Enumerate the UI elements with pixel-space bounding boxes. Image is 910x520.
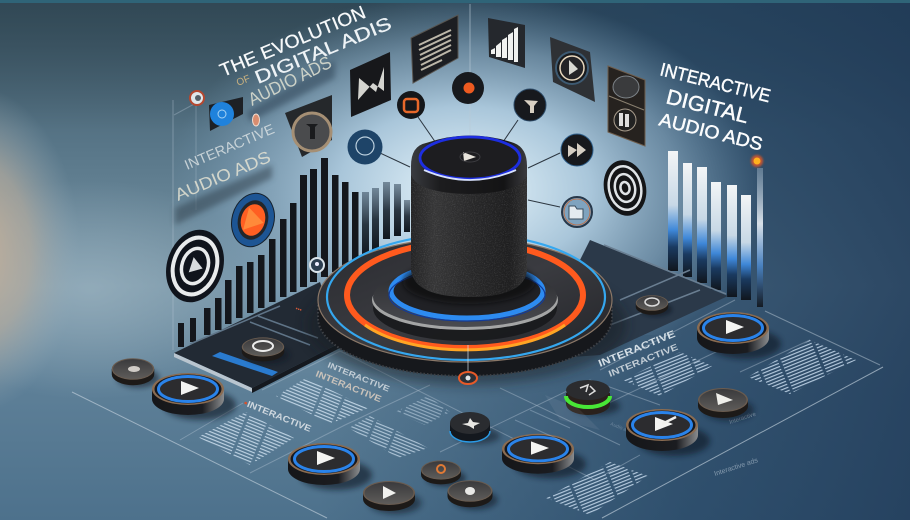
icon: spiral disc — [599, 156, 651, 220]
icon: orange dot circle — [452, 72, 484, 104]
heading: interactive digital audio ads right — [657, 59, 773, 155]
heading: interactive digital audio ads right: AUDIO ADS — [657, 109, 765, 155]
button: star blue — [450, 412, 500, 444]
title: the evolution of digital audio ads: DIGITAL ADIS — [251, 12, 394, 88]
panel: left dashboard: ••• — [294, 306, 302, 314]
button: small dark top left — [112, 358, 159, 388]
icon: small ring on chart — [310, 258, 324, 272]
button: big blue lower — [288, 443, 372, 490]
icon: connector lines — [380, 117, 560, 207]
icon: concentric target play — [157, 222, 233, 310]
heading: interactive audio ads left — [172, 121, 277, 225]
button: grey play lower — [363, 481, 421, 514]
text block: small captions — [609, 411, 759, 478]
button: blue pause play right — [626, 409, 710, 456]
text block: lower left: ▪INTERACTIVE — [242, 398, 313, 434]
button: blue upper right — [697, 312, 781, 359]
heading: interactive audio ads left: AUDIO ADS — [172, 147, 273, 205]
title: the evolution of digital audio ads — [216, 1, 394, 122]
text block: small captions: Interactive — [729, 411, 758, 426]
text block: center — [349, 416, 428, 458]
icon: orange square circle — [397, 91, 425, 119]
bar chart left — [178, 158, 410, 347]
icon: signal bars tile — [488, 18, 525, 68]
button: lock icon — [448, 480, 498, 510]
icon: small ring under disc — [459, 345, 477, 384]
bar chart right — [668, 151, 763, 307]
text block: interactive right: INTERACTIVE — [607, 342, 679, 379]
text block: center left: INTERACTIVE — [314, 369, 383, 404]
button: big blue left — [152, 373, 236, 420]
button: orange icon — [421, 460, 466, 487]
text block: center right small — [395, 396, 450, 425]
icon: play dial tile — [550, 37, 595, 102]
icon: flag circle — [514, 89, 546, 121]
heading: interactive digital audio ads right: DIGITAL — [664, 86, 751, 128]
icon: stacked control panel — [608, 66, 645, 146]
panel: right dashboard — [530, 240, 728, 360]
text block: center left — [276, 361, 392, 424]
text block: far right — [748, 340, 856, 394]
icon: fast forward circle — [561, 134, 593, 166]
title: the evolution of digital audio ads: AUDIO ADS — [245, 52, 335, 110]
text block: bottom right — [546, 462, 648, 515]
button: blue center bottom — [502, 434, 586, 478]
button: green ring — [566, 380, 620, 415]
panel: lower right fine print — [515, 395, 600, 440]
button: grey play right — [698, 388, 754, 421]
heading: interactive audio ads left: INTERACTIVE — [182, 121, 277, 173]
icon: folder circle — [562, 197, 592, 227]
icon: small red ring — [190, 91, 204, 105]
title: the evolution of digital audio ads: THE EVOLUTION — [216, 1, 369, 81]
text block: interactive right: INTERACTIVE — [597, 329, 678, 370]
icon: bowtie play tile — [350, 52, 391, 117]
title: the evolution of digital audio ads: OF — [235, 73, 252, 89]
base disc — [307, 234, 627, 385]
text block: small captions: Audio ads — [609, 421, 633, 435]
panel: left dashboard — [174, 282, 340, 393]
icon: dial photo tile — [285, 95, 332, 157]
heading: interactive digital audio ads right: INTERACTIVE — [658, 59, 773, 106]
icon: navy circle — [348, 130, 382, 164]
icon: small orange oval — [252, 114, 260, 126]
icon: blue dial tile — [209, 97, 243, 131]
icon: text screen tile — [411, 15, 458, 83]
smart speaker — [403, 136, 535, 304]
icon: orange play circle — [226, 188, 280, 252]
text block: interactive right — [597, 329, 712, 396]
text block: small captions: Interactive ads — [713, 457, 759, 478]
button: right panel dial — [636, 295, 672, 317]
button: left panel dial — [242, 337, 289, 364]
text block: center left: INTERACTIVE — [326, 361, 392, 394]
text block: lower left — [198, 398, 313, 465]
